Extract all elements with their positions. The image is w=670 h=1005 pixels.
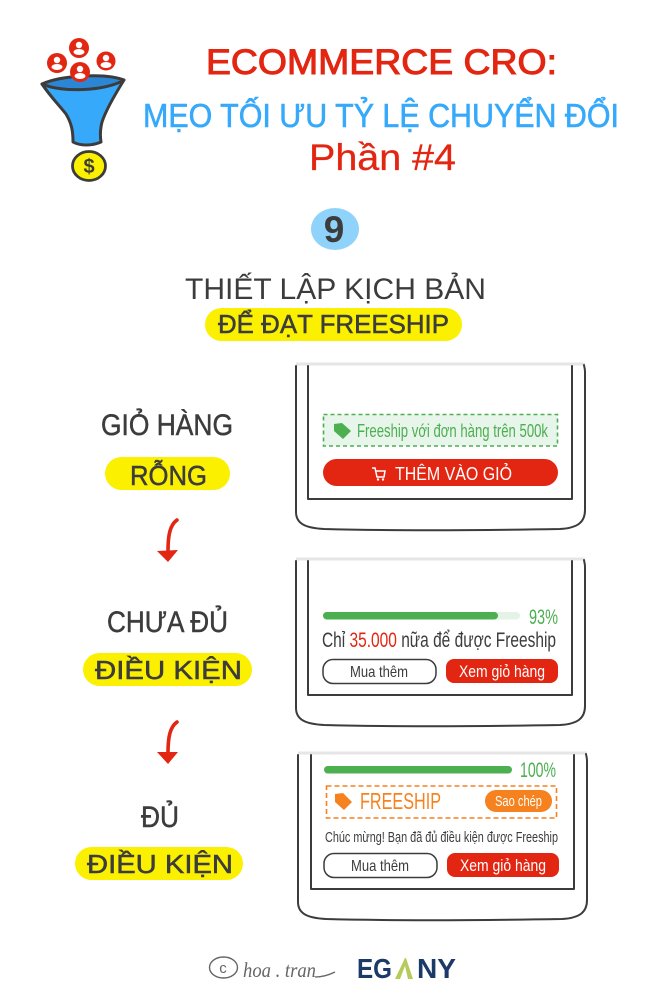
freeship coupon code: FREESHIP xyxy=(360,788,441,814)
logo: EGANY: NY xyxy=(417,953,456,984)
label: eligible: ĐỦ xyxy=(141,800,179,834)
footer credits xyxy=(210,953,456,984)
logo: EGANY xyxy=(357,953,456,984)
label: not eligible: ĐIỀU KIỆN xyxy=(95,655,242,685)
arrow: not eligible to eligible xyxy=(157,722,178,764)
arrow: empty to not eligible xyxy=(157,520,178,562)
coupon notice xyxy=(324,414,558,446)
label: empty cart: RỖNG xyxy=(130,460,207,491)
icon: funnel with people and coin xyxy=(42,38,124,180)
button: view cart: Xem giỏ hàng xyxy=(459,662,545,681)
author signature xyxy=(210,957,335,982)
progress bar 93%: 93% xyxy=(529,606,558,629)
icon: funnel body xyxy=(42,76,124,145)
panel: phone empty cart xyxy=(296,364,585,530)
author signature: hoa . tran xyxy=(243,958,316,982)
panel: phone eligible xyxy=(298,753,587,920)
coupon notice: Freeship với đơn hàng trên 500k xyxy=(357,421,549,441)
icon: dollar coin xyxy=(72,152,106,180)
progress bar 100%: 100% xyxy=(520,759,556,782)
phone frame xyxy=(296,559,585,726)
logo: EGANY: EG xyxy=(357,953,392,984)
title line: Mẹo tối ưu: MẸO TỐI ƯU TỶ LỆ CHUYỂN ĐỔI xyxy=(143,96,619,134)
heading line: THIẾT LẬP KỊCH BẢN xyxy=(185,272,486,306)
add to cart button xyxy=(323,459,558,486)
icon: dollar coin: $ xyxy=(83,156,95,178)
button: buy more xyxy=(324,854,437,878)
freeship coupon code xyxy=(326,786,556,818)
button: copy xyxy=(485,790,552,812)
title line: Ecommerce CRO: ECOMMERCE CRO: xyxy=(206,43,557,82)
add to cart button: THÊM VÀO GIỎ xyxy=(395,463,512,484)
progress bar 93% xyxy=(323,606,558,629)
button: view cart xyxy=(447,853,559,877)
button: copy: Sao chép xyxy=(495,793,542,810)
label: not eligible: CHƯA ĐỦ xyxy=(107,605,228,639)
phone frame xyxy=(298,753,587,920)
section heading xyxy=(185,272,486,341)
highlighted heading: ĐỂ ĐẠT FREESHIP xyxy=(218,309,449,339)
label: not eligible xyxy=(83,605,252,686)
label: eligible: ĐIỀU KIỆN xyxy=(87,849,233,879)
title xyxy=(143,43,619,178)
panel: phone not eligible xyxy=(296,559,585,726)
phone frame xyxy=(296,364,585,530)
button: buy more: Mua thêm xyxy=(350,664,408,681)
button: buy more: Mua thêm xyxy=(351,858,409,875)
step number badge xyxy=(311,208,359,250)
label: eligible xyxy=(75,800,243,880)
icon: person bubbles xyxy=(47,38,116,82)
button: view cart xyxy=(446,659,558,683)
button: buy more xyxy=(323,660,436,684)
remaining amount message: Chỉ 35.000 nữa để được Freeship xyxy=(322,629,556,652)
title line: Phần 4: Phần #4 xyxy=(309,137,456,178)
author signature: c xyxy=(219,960,227,977)
button: view cart: Xem giỏ hàng xyxy=(460,856,546,875)
step number badge: 9 xyxy=(324,209,344,250)
label: empty cart xyxy=(101,408,233,491)
congratulation message: Chúc mừng! Bạn đã đủ điều kiện được Freeship xyxy=(325,829,558,846)
label: empty cart: GIỎ HÀNG xyxy=(101,408,233,442)
progress bar 100% xyxy=(324,759,556,782)
